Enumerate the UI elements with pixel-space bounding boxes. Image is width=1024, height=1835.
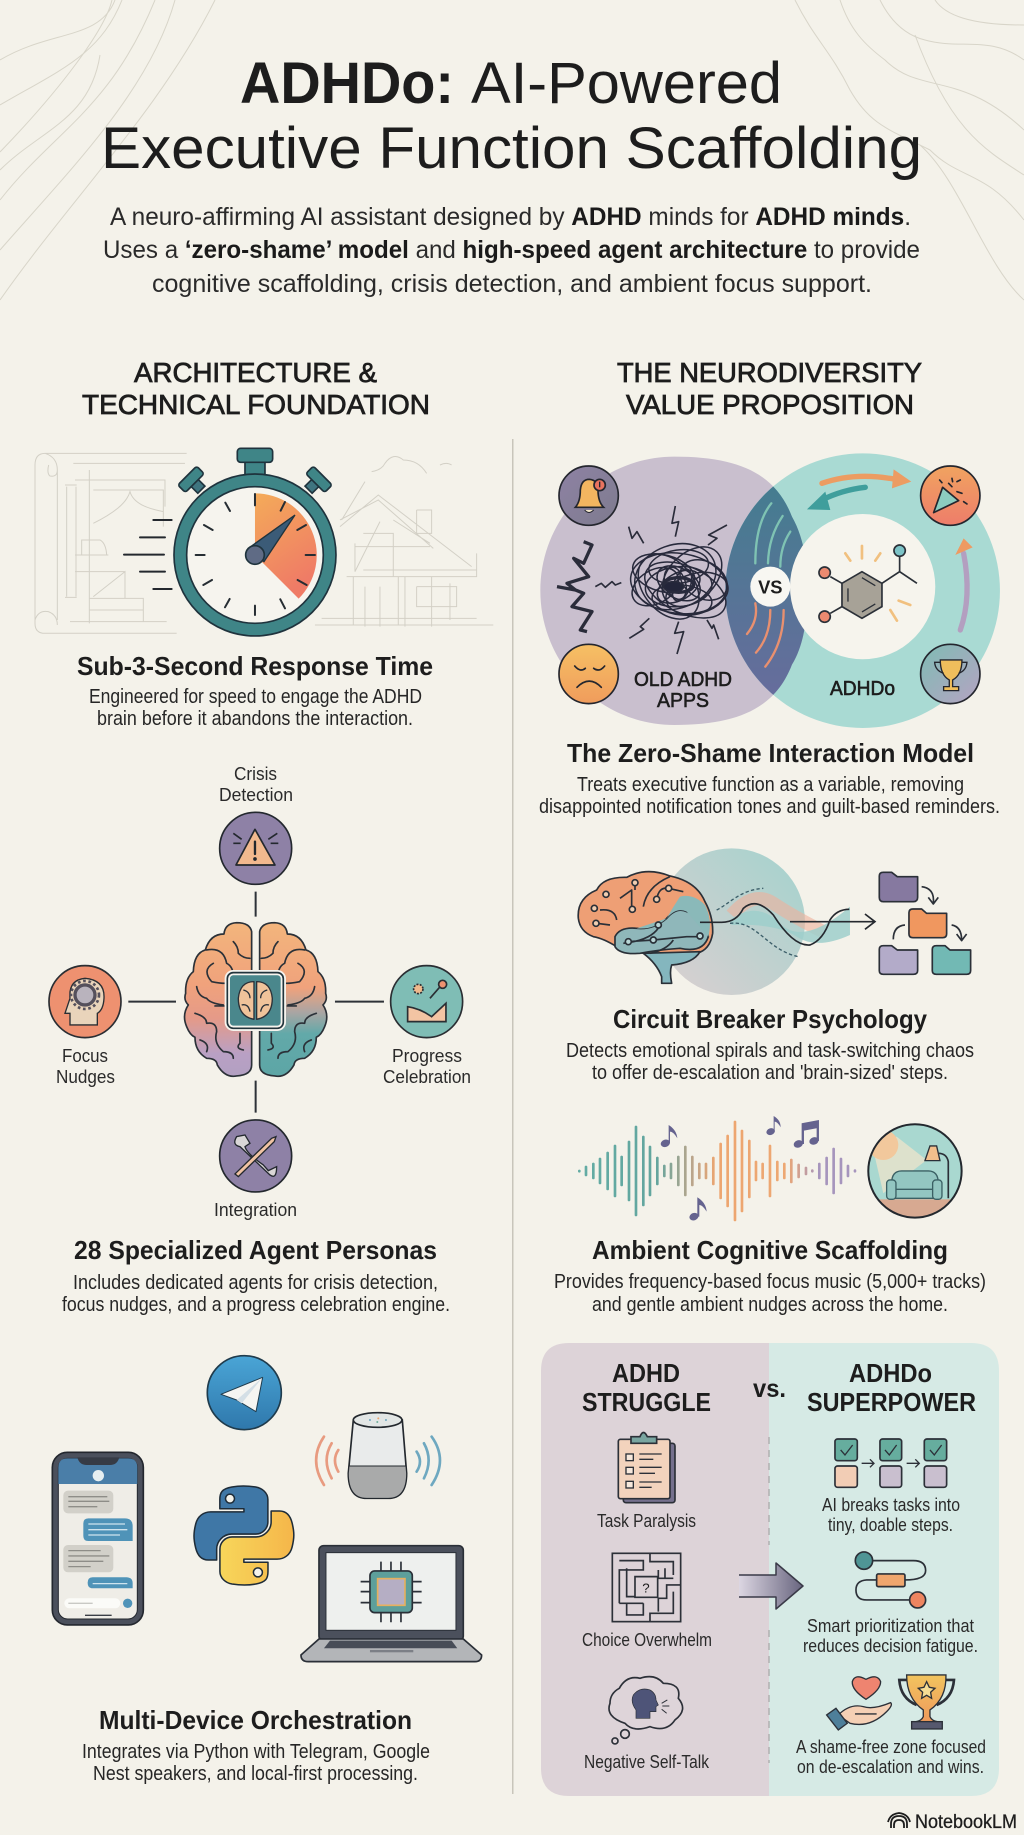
panel: ambient scaffolding bbox=[554, 1116, 986, 1316]
heading: STRUGGLE bbox=[582, 1387, 711, 1417]
icon: music notes bbox=[660, 1116, 820, 1222]
icon: trophy badge bbox=[921, 644, 980, 704]
text block bbox=[62, 1272, 450, 1316]
intro text block bbox=[103, 203, 920, 298]
label: Nudges bbox=[56, 1067, 115, 1087]
label: OLD ADHD bbox=[634, 669, 732, 691]
chart: sound waveform bbox=[579, 1122, 855, 1220]
icon: molecule bbox=[819, 545, 917, 622]
panel: multi-device bbox=[52, 1356, 482, 1785]
heading: Ambient Cognitive Scaffolding bbox=[592, 1235, 948, 1265]
icon: central brain bbox=[185, 923, 327, 1076]
panel: agent personas bbox=[49, 764, 471, 1316]
text block: Engineered for speed to engage the ADHD bbox=[89, 686, 422, 708]
icon: party popper bbox=[921, 466, 980, 525]
icon: stopwatch bbox=[124, 448, 336, 636]
label: reduces decision fatigue. bbox=[803, 1636, 978, 1656]
icon: sad face bbox=[559, 644, 618, 704]
text block: Detects emotional spirals and task-switching chaos bbox=[566, 1040, 974, 1062]
icon: heart in hand bbox=[827, 1677, 891, 1730]
label: Detection bbox=[219, 785, 293, 805]
label bbox=[796, 1737, 986, 1777]
icon: star trophy bbox=[899, 1675, 954, 1729]
text block: and gentle ambient nudges across the home. bbox=[592, 1294, 948, 1316]
title: Executive Function Scaffolding bbox=[101, 116, 922, 181]
icon: folders bbox=[879, 872, 971, 974]
text block bbox=[89, 686, 422, 730]
diagram: brain hub with agents bbox=[49, 812, 463, 1192]
heading: left column bbox=[82, 357, 430, 420]
label: APPS bbox=[657, 690, 709, 712]
loop arrows bbox=[807, 469, 973, 630]
icon: VS badge bbox=[750, 567, 790, 607]
label bbox=[634, 669, 732, 712]
label: A shame-free zone focused bbox=[796, 1737, 986, 1757]
label: Focus bbox=[62, 1046, 108, 1066]
icon: maze: ? bbox=[642, 1581, 650, 1596]
icon: thought cloud bbox=[609, 1677, 683, 1744]
text block: focus nudges, and a progress celebration engine. bbox=[62, 1294, 450, 1316]
title: AI-Powered bbox=[471, 51, 782, 116]
heading: SUPERPOWER bbox=[807, 1387, 976, 1417]
text block bbox=[554, 1271, 986, 1316]
heading: left column: ARCHITECTURE & bbox=[134, 357, 377, 388]
label: Integration bbox=[214, 1200, 297, 1220]
heading: The Zero-Shame Interaction Model bbox=[567, 738, 974, 768]
label bbox=[822, 1495, 960, 1535]
heading: ADHD bbox=[612, 1358, 680, 1388]
panel: response time bbox=[35, 448, 493, 730]
icon: maze bbox=[612, 1553, 681, 1622]
panel: circuit breaker bbox=[566, 848, 974, 1084]
icon: integration tools bbox=[220, 1120, 292, 1192]
logo: NotebookLM: NotebookLM bbox=[915, 1812, 1017, 1833]
label bbox=[803, 1616, 978, 1656]
icon: phone bbox=[52, 1452, 143, 1625]
icon: VS badge: VS bbox=[758, 576, 783, 597]
icon: task steps bbox=[835, 1439, 947, 1487]
text block bbox=[539, 774, 1000, 818]
intro text block: cognitive scaffolding, crisis detection, and ambient focus support. bbox=[152, 270, 872, 298]
heading bbox=[807, 1358, 976, 1417]
icon: crisis detection bbox=[220, 812, 292, 884]
text block: to offer de-escalation and 'brain-sized' steps. bbox=[592, 1062, 948, 1084]
icon: scribble bbox=[625, 533, 734, 631]
label: vs. bbox=[753, 1375, 786, 1403]
heading: right column: THE NEURODIVERSITY bbox=[617, 357, 922, 388]
label: on de-escalation and wins. bbox=[797, 1757, 984, 1777]
icon: python logo bbox=[194, 1486, 294, 1585]
heading: right column: VALUE PROPOSITION bbox=[626, 389, 914, 420]
arrow bbox=[739, 1563, 803, 1609]
heading bbox=[582, 1358, 711, 1417]
icon: alarm bell bbox=[559, 466, 618, 525]
heading: Sub-3-Second Response Time bbox=[77, 651, 433, 681]
heading: Multi-Device Orchestration bbox=[99, 1705, 412, 1735]
heading: 28 Specialized Agent Personas bbox=[74, 1235, 437, 1265]
icon: ambient room bbox=[868, 1124, 962, 1219]
lens wave lines bbox=[747, 503, 790, 667]
text block: Includes dedicated agents for crisis detection, bbox=[73, 1272, 438, 1294]
panel: zero-shame model bbox=[539, 453, 1000, 818]
icon: priority flow bbox=[855, 1552, 926, 1608]
text block: Nest speakers, and local-first processing. bbox=[93, 1763, 418, 1785]
title bbox=[101, 51, 922, 181]
label: ADHDo bbox=[830, 678, 895, 700]
heading: right column bbox=[617, 357, 922, 420]
icon: side brain bbox=[578, 872, 713, 983]
label: Smart prioritization that bbox=[807, 1616, 974, 1636]
label: Progress bbox=[392, 1046, 462, 1066]
text block: brain before it abandons the interaction. bbox=[97, 708, 413, 730]
icon: focus nudges bbox=[49, 966, 121, 1038]
label: Negative Self-Talk bbox=[584, 1752, 710, 1772]
label bbox=[219, 764, 293, 805]
label: Choice Overwhelm bbox=[582, 1630, 712, 1650]
label: AI breaks tasks into bbox=[822, 1495, 960, 1515]
label: Task Paralysis bbox=[597, 1511, 696, 1531]
heading: Circuit Breaker Psychology bbox=[613, 1004, 927, 1034]
text block bbox=[566, 1040, 974, 1084]
intro text block: Uses a ‘zero-shame’ model and high-speed agent architecture to provide bbox=[103, 236, 920, 264]
icon: clipboard bbox=[618, 1432, 675, 1503]
label: Celebration bbox=[383, 1067, 471, 1087]
icon: progress celebration bbox=[391, 966, 463, 1038]
label: Crisis bbox=[234, 764, 277, 784]
icon: smart speaker bbox=[316, 1413, 440, 1498]
label bbox=[383, 1046, 471, 1087]
intro text block: A neuro-affirming AI assistant designed by ADHD minds for ADHD minds. bbox=[110, 203, 911, 231]
illustration: brain to folders bbox=[578, 848, 971, 995]
illustration: blueprint and house bbox=[35, 453, 493, 633]
icon: laptop with chip bbox=[301, 1546, 482, 1662]
text block: Integrates via Python with Telegram, Google bbox=[82, 1741, 430, 1763]
title: ADHDo: bbox=[240, 51, 454, 116]
label bbox=[56, 1046, 115, 1087]
text block: Provides frequency-based focus music (5,000+ tracks) bbox=[554, 1271, 986, 1293]
text block bbox=[82, 1741, 430, 1785]
icon: stress bolts bbox=[557, 506, 727, 654]
heading: left column: TECHNICAL FOUNDATION bbox=[82, 389, 430, 420]
heading: ADHDo bbox=[849, 1358, 932, 1388]
icon: telegram bbox=[207, 1356, 281, 1430]
text block: Treats executive function as a variable, removing bbox=[577, 774, 964, 796]
panel: struggle vs superpower bbox=[541, 1343, 999, 1796]
venn diagram bbox=[540, 453, 1000, 728]
label: tiny, doable steps. bbox=[828, 1515, 953, 1535]
